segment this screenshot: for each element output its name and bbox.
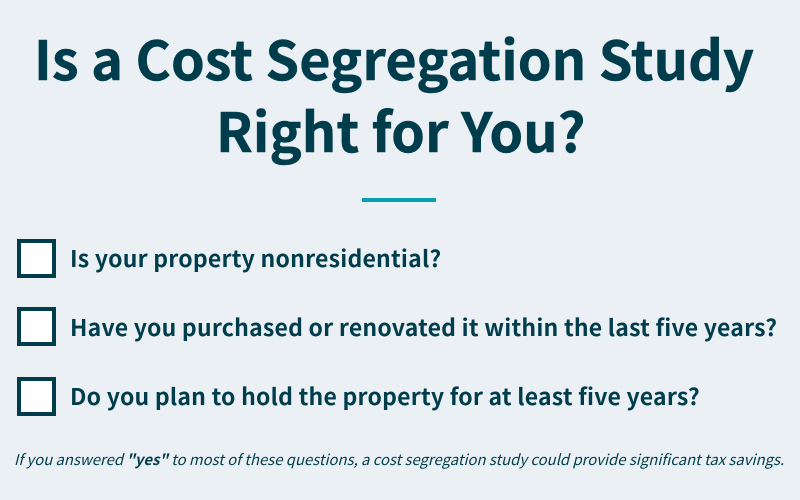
title divider accent [362, 198, 436, 202]
checklist [17, 239, 777, 416]
question 2: Have you purchased or renovated it within the last five years? [70, 309, 777, 343]
question 1: Is your property nonresidential? [70, 240, 441, 274]
question 3: Do you plan to hold the property for at least five years? [70, 378, 700, 412]
title: Right for You? [216, 89, 586, 168]
footnote: If you answered "yes" to most of these questions, a cost segregation study could provide significant tax savings. [14, 449, 784, 470]
checkbox 2 [17, 307, 56, 346]
title [34, 17, 754, 168]
checkbox 3 [17, 377, 56, 416]
checkbox 1 [17, 239, 56, 278]
title: Is a Cost Segregation Study [34, 17, 754, 96]
